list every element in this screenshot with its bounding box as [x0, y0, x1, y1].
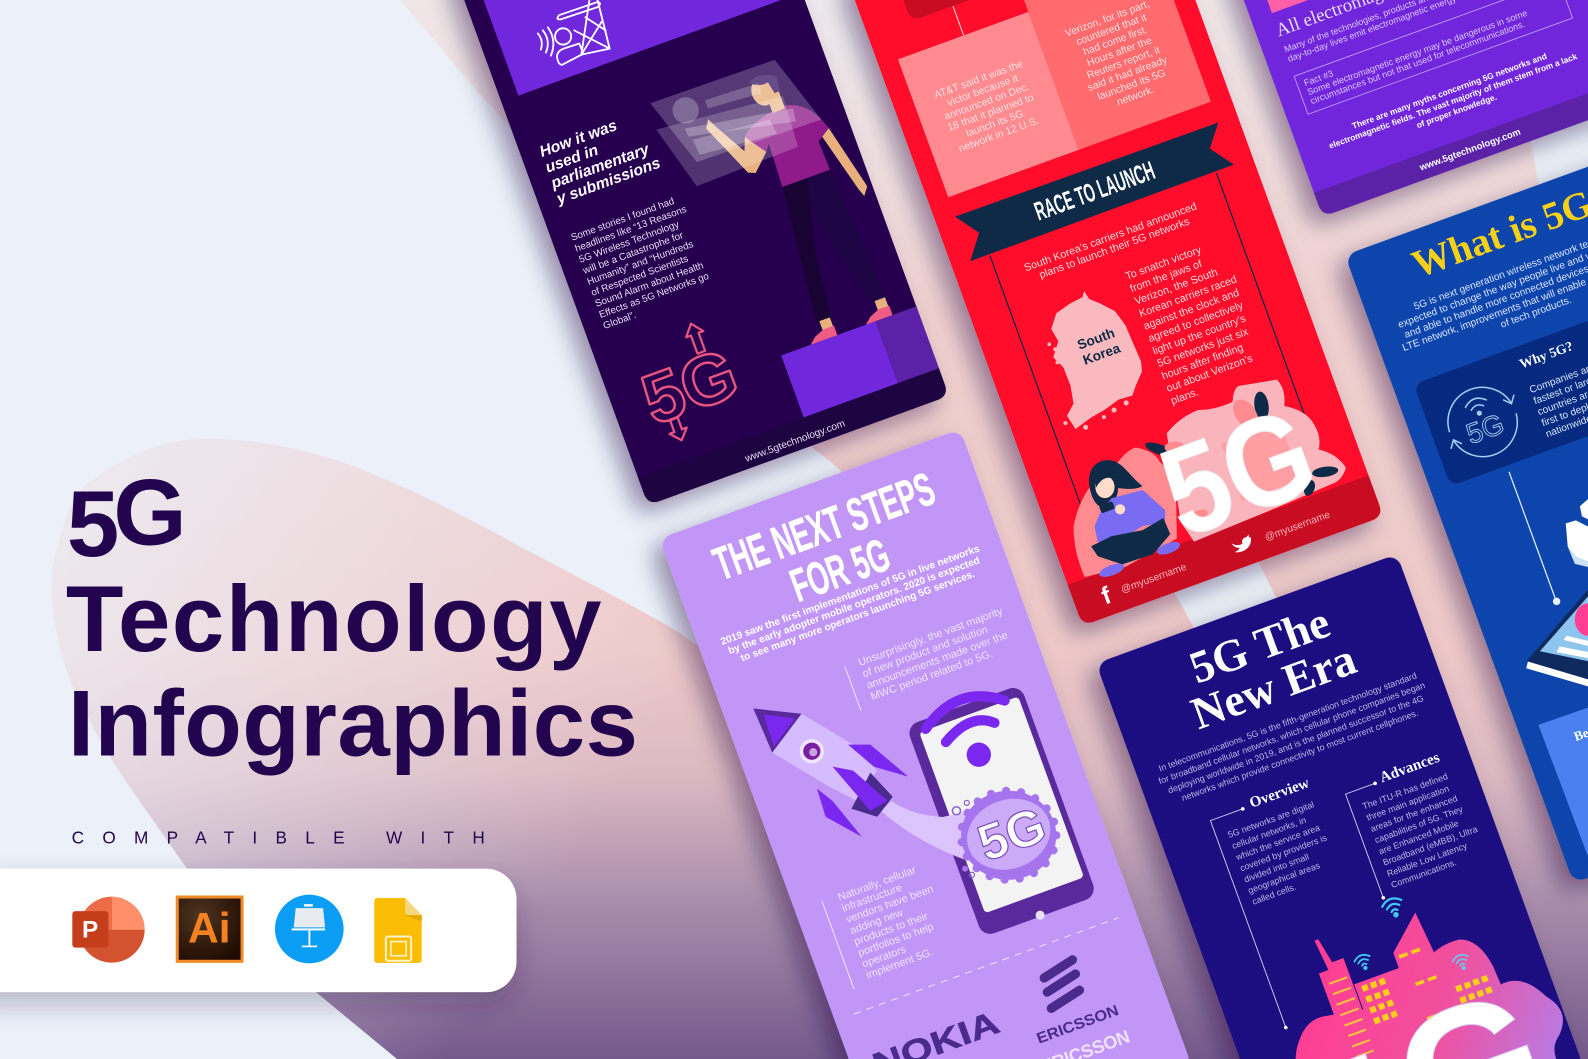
- connector line with dot: [1509, 472, 1560, 605]
- title: New Era: [1184, 633, 1363, 739]
- dashed divider: [854, 918, 1119, 1014]
- illustration: rocket trail: [881, 801, 987, 871]
- footer handle: facebook: [1098, 554, 1191, 610]
- overview connector: [1208, 807, 1320, 1030]
- overview text: cellular networks, in: [1230, 815, 1307, 851]
- footer handle: facebook: @myusername: [1120, 562, 1188, 596]
- big 5G lettering: 5G: [1143, 379, 1333, 564]
- light blue panel: [1538, 708, 1588, 857]
- AT&T text: launch its 5G: [965, 109, 1025, 140]
- illustration: blobs and leaves: [1074, 380, 1346, 577]
- illustration: pink city: [1239, 870, 1588, 1059]
- footer handle: facebook: f: [1098, 582, 1116, 610]
- paragraph: 5G networks just six: [1156, 326, 1251, 370]
- overview heading: Overview: [1247, 774, 1312, 812]
- overview text: called cells.: [1251, 882, 1297, 907]
- intro paragraph: deploying worldwide in 2019, and is the planned successor to the 4G: [1167, 693, 1425, 795]
- dark box at top: [890, 0, 1101, 21]
- note line top: [845, 666, 861, 711]
- intro paragraph: of tech products.: [1499, 295, 1573, 331]
- illustration: 5G cloud: [952, 787, 1060, 881]
- paragraph bottom: adding new: [848, 907, 905, 937]
- paragraph: light up the country’s: [1151, 313, 1247, 357]
- paragraph bottom: operators: [861, 943, 908, 970]
- advances text: Communications.: [1390, 857, 1458, 890]
- AT&T text: 18 that it planned to: [946, 92, 1036, 134]
- bold closing text: There are many myths concerning 5G networks and: [1351, 51, 1548, 131]
- tower stripes: [1329, 977, 1374, 1057]
- icon: 5G neon outline: 5G: [632, 334, 748, 441]
- advances text: capabilities of 5G. They: [1373, 804, 1465, 845]
- icon: tower with person: [538, 0, 610, 65]
- illustration: translucent screens: [650, 60, 821, 186]
- advances text: are Enhanced Mobile: [1377, 818, 1460, 856]
- why heading: Why 5G?: [1517, 338, 1575, 371]
- paragraph: agreed to collectively: [1147, 299, 1245, 345]
- paragraph: against the clock and: [1142, 287, 1241, 333]
- body text: 5G Wireless Technology: [578, 219, 681, 266]
- paragraph bottom: implement 5G.: [865, 946, 935, 982]
- footer handle: twitter: @myusername: [1263, 509, 1332, 543]
- panel: electromagnetic card: [1208, 0, 1588, 217]
- paragraph top: of new product and solution: [861, 624, 989, 680]
- AT&T text: announced on Dec.: [943, 82, 1031, 123]
- Verizon text: Verizon, for its part,: [1064, 0, 1151, 40]
- heading: used in: [543, 142, 601, 177]
- fact text: Some electromagnetic energy may be dangerous in some: [1306, 8, 1529, 97]
- AT&T panel: [898, 12, 1079, 197]
- overview text: divided into small: [1243, 852, 1310, 884]
- title line 2: Technology: [66, 566, 602, 671]
- intro text: plans to launch their 5G networks: [1038, 216, 1191, 281]
- card body group: [847, 0, 1383, 626]
- body text: Humanity” and “Hundreds: [586, 239, 695, 288]
- icon: wifi small right: [1451, 953, 1472, 972]
- advances heading: Advances: [1377, 749, 1442, 786]
- advances text: three main application: [1365, 783, 1450, 823]
- panel: race to launch card: [847, 0, 1383, 626]
- logo: Ericsson wordmark: ERICSSON: [1034, 1002, 1121, 1047]
- footer band: [1068, 475, 1383, 626]
- body text: Sound Alarm about Health: [594, 260, 705, 310]
- illustration: sitting girl: [1089, 460, 1182, 580]
- icon: PowerPoint: [72, 897, 145, 963]
- AT&T text: AT&T said it was the: [933, 59, 1025, 101]
- pale band behind cards: [1155, 526, 1286, 648]
- title line 1: 5: [67, 471, 119, 576]
- paragraph bottom: products to their: [852, 910, 930, 948]
- body text: Some stories I found had: [570, 196, 676, 244]
- top purple band: [471, 0, 783, 96]
- Verizon text: Hours after the: [1086, 35, 1154, 69]
- illustration: rocket: [753, 708, 908, 837]
- illustration: 5G cloud: 5G: [970, 796, 1053, 872]
- map: South Korea: South: [1075, 325, 1117, 353]
- footer band: [1314, 75, 1588, 217]
- overview text: covered by providers is: [1239, 832, 1329, 873]
- intro paragraph: networks which provide connectivity to most current cellphones.: [1180, 708, 1420, 803]
- Verizon panel: [997, 0, 1211, 150]
- panel: how it was used card: [454, 0, 954, 505]
- icon: wifi small left: [1353, 953, 1373, 972]
- illustration: tablet: [1526, 590, 1588, 686]
- paragraph: To snatch victory: [1124, 244, 1204, 283]
- AT&T text: victor because it: [946, 73, 1020, 109]
- title: 5G The: [1183, 596, 1336, 693]
- Verizon text: countered that it: [1075, 12, 1148, 48]
- heading: parliamentary: [548, 141, 653, 193]
- pink label: [1257, 0, 1367, 13]
- fact text: circumstances but not that used for telecommunications.: [1309, 19, 1526, 106]
- overview text: which the service area: [1234, 822, 1321, 863]
- paragraph top: Unsurprisingly, the vast majority: [857, 605, 1005, 669]
- intro paragraph: In telecommunications, 5G is the fifth-generation technology standard: [1157, 670, 1418, 773]
- Verizon text: said it had already: [1086, 55, 1170, 94]
- card body group: [1096, 554, 1588, 1059]
- card body group: [454, 0, 954, 505]
- dark panel: [1414, 280, 1588, 486]
- note line bottom: [822, 901, 854, 989]
- paragraph top: announcements made over the: [865, 629, 1009, 692]
- connector line: [953, 6, 964, 35]
- paragraph: hours after finding: [1160, 342, 1245, 382]
- white app bar: [0, 869, 517, 992]
- advances text: areas for the enhanced: [1369, 793, 1459, 834]
- icon: Adobe Illustrator: Ai: [188, 906, 231, 953]
- compatible with label: COMPATIBLE WITH: [72, 827, 485, 847]
- fact text: Fact #3: [1303, 68, 1335, 88]
- paragraph bottom: portfolios to help: [857, 921, 935, 959]
- title: [66, 460, 638, 775]
- overview text: 5G networks are digital: [1226, 799, 1315, 840]
- intro paragraph: for broadband cellular networks, which cellular phone companies began: [1157, 680, 1426, 786]
- heading: How it was: [537, 117, 620, 161]
- Verizon text: had come first.: [1082, 25, 1149, 58]
- card body group: [1208, 0, 1588, 217]
- body text: headlines like “13 Reasons: [574, 204, 688, 255]
- title line 1: G: [113, 460, 187, 565]
- ribbon banner: RACE TO LAUNCH: [1030, 155, 1159, 226]
- body text: will be a Catastrophe for: [581, 230, 686, 277]
- panel: next steps card: [659, 429, 1192, 1059]
- title: THE NEXT STEPS: [707, 462, 941, 590]
- paragraph top: MWC period related to 5G.: [869, 648, 994, 703]
- advances text: The ITU-R has defined: [1361, 771, 1449, 811]
- purple block: [781, 306, 939, 417]
- frame lines: [990, 173, 1307, 504]
- paragraph: Verizon, the South: [1133, 266, 1219, 308]
- card body group: [659, 429, 1192, 1059]
- map: South Korea: [1047, 291, 1142, 430]
- body text: Global”.: [602, 310, 638, 332]
- paragraph bottom: vendors have been: [844, 883, 935, 926]
- panel: what is 5G card: [1345, 137, 1588, 883]
- title line 3: Infographics: [68, 670, 638, 775]
- panel: 5G the new era card: [1096, 554, 1588, 1059]
- body text: of Respected Scientists: [590, 253, 690, 299]
- map: South Korea: Korea: [1081, 340, 1123, 368]
- paragraph bottom: infrastructure: [840, 882, 904, 915]
- advances text: Reliable Low Latency: [1386, 840, 1469, 879]
- advances text: Broadband (eMBB), Ultra: [1381, 824, 1479, 868]
- icon: PowerPoint: P: [82, 917, 98, 944]
- paragraph: out about Verizon’s: [1165, 352, 1254, 395]
- paragraph: plans.: [1169, 386, 1200, 407]
- intro text: South Korea’s carriers had announced: [1023, 201, 1198, 274]
- body text: Effects as 5G Networks go: [598, 271, 711, 321]
- bold closing text: electromagnetic fields. The vast majority of them stem from a lack: [1327, 51, 1579, 151]
- pale corner behind cards: [1524, 111, 1588, 197]
- AT&T text: network in 12 U.S.: [957, 116, 1040, 155]
- illustration: standing person: [695, 54, 912, 353]
- icon: Adobe Illustrator: [177, 897, 242, 961]
- bold closing text: of proper knowledge.: [1415, 92, 1498, 130]
- logo: Ericsson bars: [1044, 960, 1080, 1008]
- windows: [1356, 929, 1494, 1038]
- illustration: phone: [906, 685, 1097, 937]
- overview text: geographical areas: [1247, 860, 1322, 896]
- lead paragraph: to see many more operators launching 5G services.: [739, 569, 977, 664]
- card body group: [1345, 137, 1588, 883]
- icon: wifi large: [1381, 896, 1406, 920]
- icon: circular 5G wifi: 5G: [1462, 408, 1509, 451]
- fact box: [1294, 0, 1573, 114]
- advances connector: [1343, 781, 1415, 900]
- icon: circular 5G wifi: [1435, 376, 1531, 468]
- lead paragraph: by the early adopter mobile operators. 2020 is expected: [727, 555, 981, 657]
- heading: y submissions: [554, 155, 663, 208]
- footer handle: twitter: [1231, 506, 1332, 555]
- lead paragraph: 2019 saw the first implementations of 5G in live networks: [719, 543, 982, 648]
- paragraph: Korean carriers raced: [1138, 274, 1239, 320]
- footer url: www.5gtechnology.com: [743, 418, 847, 465]
- Verizon text: launched its 5G: [1096, 68, 1167, 103]
- illustration: white 3D shape: [1566, 499, 1588, 567]
- Verizon text: network.: [1115, 85, 1156, 108]
- title: FOR 5G: [783, 528, 896, 612]
- icon: Google Slides: [374, 898, 422, 963]
- footer url: www.5gtechnology.com: [1417, 126, 1522, 173]
- ribbon banner: [955, 123, 1234, 261]
- Verizon text: Reuters report, it: [1086, 45, 1162, 82]
- paragraph: from the jaws of: [1128, 258, 1204, 295]
- icon: Keynote: [275, 895, 344, 963]
- footer band: [638, 368, 949, 505]
- paragraph bottom: Naturally, cellular: [836, 864, 918, 904]
